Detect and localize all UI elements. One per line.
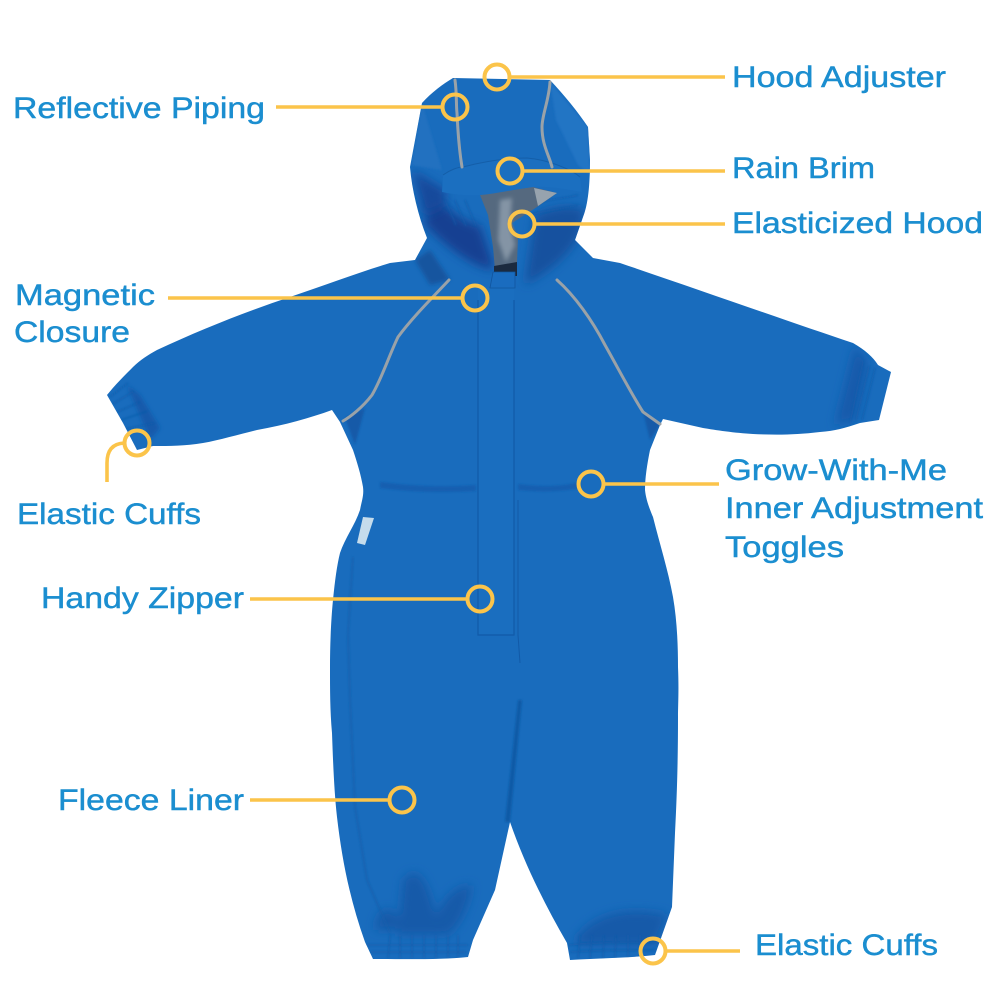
- callout: Fleece Liner: [58, 784, 414, 817]
- callout: Grow-With-Me Inner Adjustment Toggles: Grow-With-Me: [725, 454, 947, 487]
- hood lining: [480, 187, 557, 270]
- callout: Elasticized Hood: Elasticized Hood: [732, 207, 983, 240]
- callout: Rain Brim: [498, 152, 875, 185]
- placket: [478, 288, 514, 635]
- callout: Reflective Piping: [13, 92, 468, 125]
- reflective piping: [343, 80, 660, 424]
- callout: Elasticized Hood: [510, 207, 983, 240]
- callout: Hood Adjuster: [484, 61, 946, 94]
- callout: Grow-With-Me Inner Adjustment Toggles: [578, 454, 984, 564]
- callout: Elastic Cuffs (ankle): Elastic Cuffs: [755, 929, 938, 962]
- callout: Elastic Cuffs (ankle): [640, 929, 938, 964]
- elastic gathers: [110, 195, 875, 958]
- callout: Magnetic Closure: Closure: [14, 316, 130, 349]
- callout: Elastic Cuffs (sleeve): Elastic Cuffs: [17, 498, 201, 531]
- callout: Fleece Liner: Fleece Liner: [58, 784, 244, 817]
- callout: Handy Zipper: [41, 582, 492, 615]
- callout: Elastic Cuffs (sleeve): [17, 430, 201, 531]
- shading folds: [110, 82, 875, 958]
- callout: Grow-With-Me Inner Adjustment Toggles: Toggles: [725, 531, 844, 564]
- callout: Hood Adjuster: Hood Adjuster: [732, 61, 946, 94]
- callout: Magnetic Closure: [14, 279, 488, 349]
- callout: Magnetic Closure: Magnetic: [15, 279, 155, 312]
- hood brim: [442, 183, 532, 195]
- callout: Rain Brim: Rain Brim: [732, 152, 875, 185]
- callout: Handy Zipper: Handy Zipper: [41, 582, 244, 615]
- callout: Reflective Piping: Reflective Piping: [13, 92, 265, 125]
- garment label tag: [357, 517, 374, 545]
- suit outline: [107, 78, 891, 960]
- garment: blue rain suit: [107, 78, 891, 960]
- callout: Grow-With-Me Inner Adjustment Toggles: Inner Adjustment: [725, 492, 984, 525]
